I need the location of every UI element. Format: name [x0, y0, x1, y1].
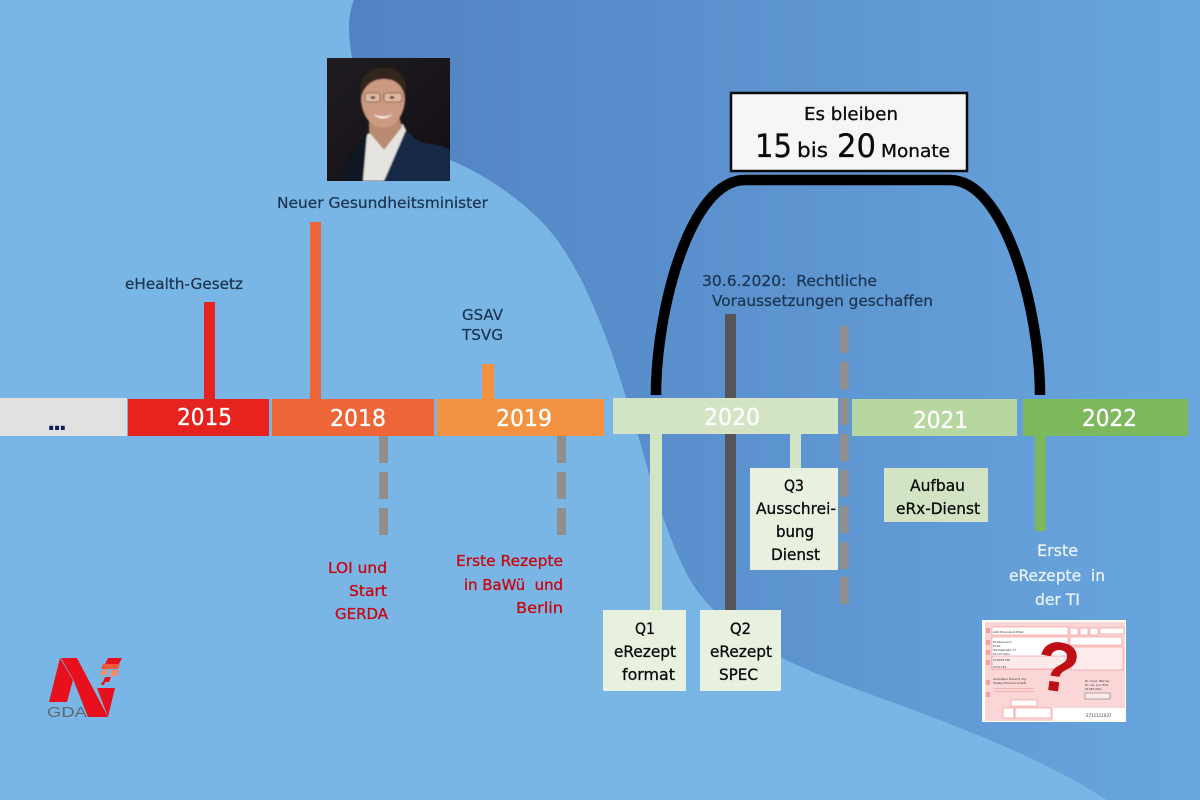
icon: prescription form with question mark: 118015330	[993, 658, 1010, 662]
text: Erste eRezepte in der TI: Erste	[1037, 541, 1078, 560]
box: Q1 eRezept format	[603, 610, 686, 691]
logo: GDA: GDA	[47, 704, 87, 721]
box: Q1 eRezept format: eRezept	[614, 642, 676, 661]
dashed line: 2020/2021	[840, 326, 849, 604]
stem: 2018	[310, 222, 321, 399]
stem: 2022	[1035, 436, 1046, 531]
icon: prescription form with question mark: Amlodipin Hexal 5 mg	[993, 677, 1026, 681]
label: legal requirements: 30.6.2020: Rechtliche	[702, 272, 877, 290]
icon: prescription form with question mark: 2711111037	[1086, 713, 1112, 718]
icon: prescription form with question mark	[982, 620, 1126, 722]
stem: 2015	[204, 302, 215, 399]
text: LOI und Start GERDA: GERDA	[335, 605, 388, 623]
box: Q2 eRezept SPEC	[700, 610, 781, 691]
photo: minister portrait	[327, 58, 450, 181]
text: LOI und Start GERDA: LOI und	[328, 559, 387, 577]
stem: 2019	[482, 364, 494, 399]
box: Aufbau eRx-Dienst: Aufbau	[910, 476, 965, 495]
box: Q3 Ausschreibung Dienst: Q3	[784, 476, 804, 495]
callout: Es bleiben 15 bis 20 Monate: Es bleiben	[804, 104, 898, 125]
text: LOI und Start GERDA	[328, 559, 388, 623]
box: Q3 Ausschreibung Dienst: Dienst	[771, 545, 820, 564]
icon: prescription form with question mark: Dr. med. Werner	[1085, 679, 1110, 683]
bar: 2018: 2018	[330, 406, 386, 432]
bar: 2022	[1023, 399, 1188, 436]
text: Erste eRezepte in der TI	[1009, 541, 1105, 609]
logo: GDA	[47, 658, 122, 721]
icon: prescription form with question mark: Muster-Pharma GmbH	[993, 681, 1026, 685]
label: legal requirements	[702, 272, 933, 310]
bar: 2021: 2021	[913, 408, 968, 434]
callout: Es bleiben 15 bis 20 Monate: 20	[837, 127, 876, 165]
label: GSAV TSVG: TSVG	[461, 326, 503, 344]
box: Q3 Ausschreibung Dienst: bung	[776, 522, 814, 541]
stem: Q1	[650, 434, 662, 610]
dashed line: 2019	[557, 436, 566, 535]
callout: Es bleiben 15 bis 20 Monate: 15	[755, 127, 792, 165]
text: Erste Rezepte in BaWü und Berlin: Erste Rezepte	[456, 552, 563, 570]
timeline bars	[0, 398, 1188, 436]
bar: earlier years	[0, 398, 127, 436]
icon: prescription form with question mark: ?	[1031, 626, 1084, 709]
icon: prescription form with question mark: Mustermann	[993, 640, 1012, 644]
stem: Q3	[790, 434, 801, 468]
text: Erste Rezepte in BaWü und Berlin: Berlin	[516, 599, 563, 617]
box: Q3 Ausschreibung Dienst: Ausschrei-	[756, 499, 836, 518]
stem: Q2 dark line	[725, 314, 736, 610]
text: LOI und Start GERDA: Start	[349, 582, 387, 600]
background wave shape	[349, 0, 1200, 800]
box: Q3 Ausschreibung Dienst	[750, 468, 838, 570]
bar: 2019: 2019	[496, 406, 552, 432]
callout: Es bleiben 15 bis 20 Monate	[731, 93, 967, 171]
icon: prescription form with question mark: 2711130	[993, 665, 1006, 669]
bar: 2021	[852, 399, 1017, 436]
label: legal requirements: Voraussetzungen geschaffen	[712, 292, 933, 310]
bar: 2015: 2015	[177, 405, 232, 431]
icon: prescription form with question mark: Heidestraße 17	[993, 648, 1016, 652]
bar: 2015	[128, 399, 269, 436]
bar: 2022: 2022	[1082, 406, 1137, 432]
label: eHealth-Gesetz: eHealth-Gesetz	[125, 275, 243, 293]
bar: 2019	[437, 399, 604, 436]
label: GSAV TSVG: GSAV	[462, 306, 503, 324]
bar: earlier years: ...	[47, 411, 67, 436]
callout: Es bleiben 15 bis 20 Monate: Monate	[881, 141, 950, 162]
box: Q2 eRezept SPEC: SPEC	[719, 665, 758, 684]
label: Neuer Gesundheitsminister: Neuer Gesundheitsminister	[277, 194, 489, 212]
bar: 2018	[272, 399, 434, 436]
box: Aufbau eRx-Dienst: eRx-Dienst	[896, 499, 980, 518]
arc: remaining time bracket	[656, 180, 1040, 395]
box: Q2 eRezept SPEC: Q2	[730, 619, 751, 638]
icon: prescription form with question mark: Erika	[993, 644, 1001, 648]
icon: prescription form with question mark: AOK Rheinland-Pfalz	[993, 630, 1024, 634]
box: Q1 eRezept format: Q1	[635, 619, 655, 638]
icon: prescription form with question mark: 51147 Köln	[993, 652, 1010, 656]
callout: Es bleiben 15 bis 20 Monate: bis	[797, 138, 828, 162]
label: GSAV TSVG	[461, 306, 503, 344]
icon: prescription form with question mark: 51063 Köln	[1085, 687, 1102, 691]
dashed line: 2018	[379, 436, 388, 535]
box: Q2 eRezept SPEC: eRezept	[710, 642, 772, 661]
text: Erste eRezepte in der TI: der TI	[1035, 590, 1080, 609]
box: Q1 eRezept format: format	[622, 665, 675, 684]
text: Erste Rezepte in BaWü und Berlin: in BaWü und	[464, 576, 563, 594]
bar: 2020	[613, 398, 838, 434]
icon: prescription form with question mark: Dr. rer. pol. Erik	[1085, 683, 1108, 687]
text: Erste eRezepte in der TI: eRezepte in	[1009, 566, 1105, 585]
text: Erste Rezepte in BaWü und Berlin	[456, 552, 563, 617]
box: Aufbau eRx-Dienst	[884, 468, 988, 522]
bar: 2020: 2020	[704, 405, 760, 431]
